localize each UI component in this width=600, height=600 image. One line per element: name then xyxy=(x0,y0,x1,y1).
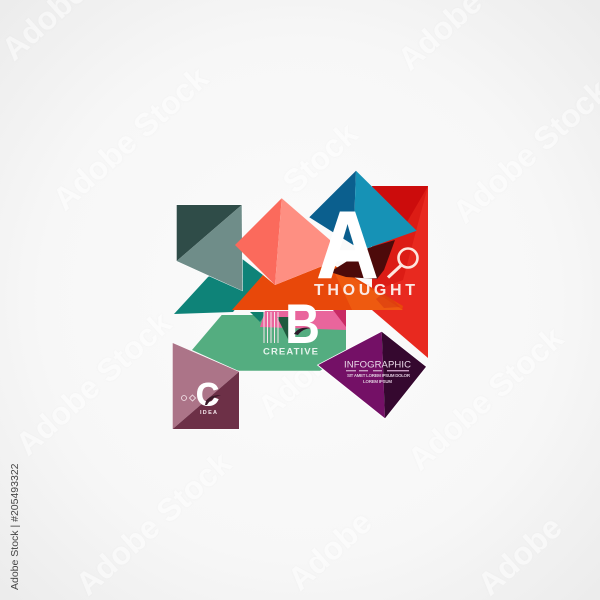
icon: dark swoosh in B xyxy=(294,328,311,335)
watermarks: Adobe xyxy=(471,509,569,600)
watermarks: Stock xyxy=(276,115,365,200)
panel: red folded shape xyxy=(372,186,428,358)
label INFOGRAPHIC: INFOGRAPHIC xyxy=(344,360,411,370)
text: lorem line 1: SIT AMET LOREM IPSUM DOLOR xyxy=(347,373,411,378)
panel: teal triangle xyxy=(174,258,263,314)
watermarks: Adobe Stock xyxy=(9,304,178,462)
watermarks: Adobe xyxy=(281,504,379,597)
label THOUGHT: THOUGHT xyxy=(314,282,415,299)
watermarks: Adobe Stock xyxy=(401,319,570,477)
icon: vertical stripes xyxy=(264,312,278,343)
watermarks: Adobe Stock xyxy=(69,444,238,600)
watermarks: Adobe Stock xyxy=(46,59,215,217)
panel: dark shadow under blue pyramid xyxy=(330,240,395,279)
panel: purple pyramid xyxy=(317,331,427,420)
panel: mauve folded square xyxy=(172,342,240,430)
panel: blue pyramid xyxy=(309,171,417,248)
stock id side label: Adobe Stock | #205493322 xyxy=(9,463,21,590)
decorative bars xyxy=(346,370,409,371)
letter C: C xyxy=(196,376,219,412)
panel: dark grey folded square xyxy=(176,204,243,291)
letter B: B xyxy=(285,292,320,355)
letter A: A xyxy=(316,192,378,299)
label CREATIVE: CREATIVE xyxy=(263,346,318,358)
label IDEA: IDEA xyxy=(200,410,217,416)
watermarks: Adobe xyxy=(251,332,349,425)
panel: orange band xyxy=(232,263,403,310)
icon: circle and diamond xyxy=(182,395,196,401)
icon: magnifier xyxy=(388,248,418,278)
icon: swoosh over C xyxy=(205,395,221,405)
text: lorem line 2: LOREM IPSUM xyxy=(363,379,392,384)
panel: salmon pyramid xyxy=(235,198,332,285)
panel: green shape xyxy=(192,310,346,371)
